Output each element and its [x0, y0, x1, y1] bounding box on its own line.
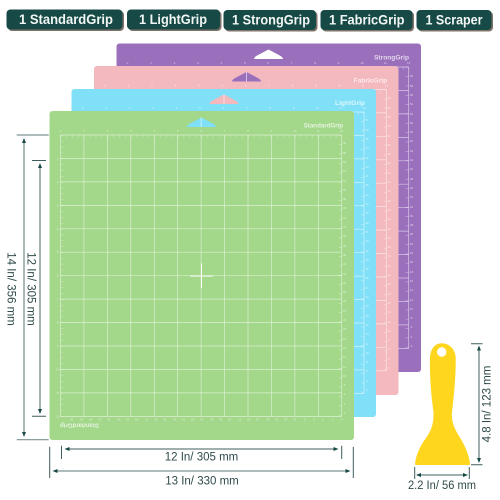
- ruler numbers: purple right: 42: [410, 158, 413, 162]
- ruler numbers: pink right: 10: [387, 329, 391, 333]
- ruler numbers: green left: 10: [56, 368, 60, 372]
- ruler numbers: green bottom: [70, 418, 343, 422]
- ruler numbers: blue right: 34: [365, 239, 369, 243]
- ruler numbers: blue right: 36: [365, 230, 369, 234]
- ruler numbers: pink right: 46: [387, 161, 391, 165]
- ruler numbers: green bottom: 10: [293, 418, 296, 422]
- ruler numbers: green right: 54: [343, 169, 346, 173]
- ruler numbers: blue right: 50: [365, 165, 369, 169]
- mat: StrongGrip purple: [116, 44, 421, 372]
- ruler numbers: pink top: 4: [198, 83, 200, 87]
- ruler numbers: green bottom: 54: [89, 418, 92, 422]
- ruler numbers: green left: 6: [57, 274, 59, 278]
- ruler numbers: pink top: 10: [338, 83, 341, 87]
- notch: white hanger: [254, 50, 283, 59]
- ruler numbers: pink top: 12: [385, 83, 388, 87]
- ruler numbers: pink right: 40: [387, 189, 391, 193]
- dimension: mat width 13 in: [50, 447, 353, 488]
- ruler numbers: purple right: 50: [410, 121, 413, 125]
- ruler numbers: green bottom: 46: [126, 418, 129, 422]
- ruler numbers: green left: [56, 156, 60, 418]
- ruler numbers: blue right: 32: [365, 249, 369, 253]
- ruler numbers: green right: 8: [344, 383, 346, 387]
- pill: 1 Scraper: [416, 10, 493, 32]
- ruler numbers: purple right: 6: [411, 325, 413, 329]
- ruler numbers: green right: 56: [343, 160, 346, 164]
- ruler numbers: blue top: 7: [246, 106, 248, 110]
- ruler numbers: green right: 40: [343, 234, 346, 238]
- ruler numbers: purple top: [127, 61, 411, 65]
- ruler numbers: pink right: 50: [387, 143, 391, 147]
- ruler numbers: green bottom: 22: [238, 418, 241, 422]
- ruler numbers: green right: 30: [343, 281, 346, 285]
- ruler numbers: pink top: 2: [151, 83, 153, 87]
- ruler numbers: purple right: 14: [410, 288, 413, 292]
- ruler numbers: pink right: 26: [387, 254, 391, 258]
- ruler numbers: purple top: 3: [197, 61, 199, 65]
- pill: 1 Scraper: 1 Scraper: [426, 12, 483, 28]
- ruler numbers: green top: 4: [153, 129, 155, 133]
- ruler numbers: green right: 48: [343, 197, 346, 201]
- ruler numbers: purple right: 54: [410, 102, 413, 106]
- ruler numbers: green right: 38: [343, 244, 346, 248]
- ruler numbers: green right: 42: [343, 225, 346, 229]
- dimension: scraper height: 4.8 In/ 123 mm: [482, 366, 494, 442]
- ruler numbers: blue top: 0: [82, 106, 84, 110]
- ruler numbers: green bottom: 2: [332, 418, 334, 422]
- ruler numbers: pink right: 48: [387, 152, 391, 156]
- notch: pink hanger: [210, 94, 238, 104]
- ruler numbers: green left: 4: [57, 227, 59, 231]
- ruler numbers: blue right: 44: [365, 193, 369, 197]
- ruler numbers: blue right: 6: [366, 369, 368, 373]
- ruler numbers: blue top: 2: [129, 106, 131, 110]
- pill: 1 LightGrip: 1 LightGrip: [139, 12, 207, 27]
- label: StandardGrip upside down: StandardGrip: [60, 422, 99, 428]
- ruler numbers: pink right: 2: [388, 366, 390, 370]
- ruler numbers: pink right: 42: [387, 180, 391, 184]
- ruler numbers: pink right: 56: [387, 115, 391, 119]
- ruler numbers: blue top: 1: [105, 106, 107, 110]
- ruler numbers: purple right: 36: [410, 186, 413, 190]
- ruler numbers: blue right: 14: [365, 332, 369, 336]
- ruler numbers: green top: 1: [83, 129, 85, 133]
- ruler numbers: green right: 28: [343, 290, 346, 294]
- ruler numbers: green bottom: 44: [135, 418, 138, 422]
- ruler numbers: pink right: 30: [387, 236, 391, 240]
- ruler numbers: purple top: 9: [338, 61, 340, 65]
- ruler numbers: purple right: 22: [410, 251, 413, 255]
- ruler numbers: pink top: 3: [175, 83, 177, 87]
- ruler numbers: purple right: 2: [411, 344, 413, 348]
- label: StandardGrip: StandardGrip: [304, 122, 343, 130]
- ruler numbers: green right: 32: [343, 272, 346, 276]
- ruler numbers: green top: 9: [271, 129, 273, 133]
- ruler numbers: purple right: 34: [410, 195, 413, 199]
- ruler numbers: green bottom: 16: [266, 418, 269, 422]
- icon: yellow scraper: [415, 343, 470, 465]
- ruler numbers: blue right: 18: [365, 314, 369, 318]
- ruler numbers: purple top: 1: [150, 61, 152, 65]
- pill: 1 FabricGrip: [320, 10, 414, 32]
- ruler numbers: green top: 5: [177, 129, 179, 133]
- dimension: scraper height: [471, 344, 494, 465]
- notch centre line: pink mat: [246, 72, 248, 82]
- dimension: grid width 12 in: 12 In/ 305 mm: [165, 452, 238, 464]
- ruler numbers: green right: 22: [343, 318, 346, 322]
- ruler numbers: blue top: 11: [339, 106, 342, 110]
- ruler numbers: green bottom: 0: [341, 418, 343, 422]
- pill: 1 StrongGrip: [224, 10, 318, 32]
- ruler numbers: purple top: 11: [384, 61, 387, 65]
- dimension: grid height 12 in: [24, 160, 46, 416]
- ruler numbers: blue top: 9: [293, 106, 295, 110]
- ruler numbers: green bottom: 38: [163, 418, 166, 422]
- ruler numbers: green right: 6: [344, 392, 346, 396]
- ruler numbers: blue top: 6: [223, 106, 225, 110]
- ruler numbers: purple top: 4: [220, 61, 222, 65]
- ruler numbers: pink right: 16: [387, 301, 391, 305]
- center cross: [190, 264, 213, 288]
- ruler numbers: blue right: 24: [365, 286, 369, 290]
- ruler numbers: pink right: 22: [387, 273, 391, 277]
- ruler numbers: blue right: 8: [366, 360, 368, 364]
- ruler numbers: pink right: 20: [387, 282, 391, 286]
- ruler numbers: green right: 20: [343, 327, 346, 331]
- ruler numbers: pink right: 38: [387, 199, 391, 203]
- ruler numbers: blue right: 58: [365, 128, 369, 132]
- dimension: scraper width: 2.2 In/ 56 mm: [408, 480, 476, 492]
- ruler numbers: pink top: 8: [292, 83, 294, 87]
- ruler numbers: purple top: 12: [407, 61, 411, 65]
- ruler numbers: purple top: 7: [291, 61, 293, 65]
- ruler numbers: blue right: 40: [365, 211, 369, 215]
- ruler numbers: purple right: [410, 74, 413, 348]
- ruler numbers: blue right: 20: [365, 304, 369, 308]
- ruler numbers: green bottom: 30: [200, 418, 203, 422]
- ruler numbers: green top: 6: [200, 129, 202, 133]
- ruler numbers: green right: 2: [344, 411, 346, 415]
- ruler numbers: blue top: [82, 106, 366, 110]
- ruler numbers: green right: 4: [344, 402, 346, 406]
- ruler numbers: green right: 52: [343, 179, 346, 183]
- ruler numbers: purple right: 24: [410, 242, 413, 246]
- ruler numbers: green right: [343, 141, 346, 415]
- ruler numbers: purple right: 8: [411, 316, 413, 320]
- ruler numbers: pink right: 24: [387, 264, 391, 268]
- ruler numbers: pink top: 11: [361, 83, 365, 87]
- ruler numbers: blue right: 16: [365, 323, 369, 327]
- ruler numbers: green left: 1: [57, 156, 59, 160]
- ruler numbers: pink top: 0: [104, 83, 106, 87]
- ruler numbers: green top: 11: [317, 129, 320, 133]
- ruler numbers: green bottom: 8: [304, 418, 306, 422]
- ruler numbers: purple right: 46: [410, 139, 413, 143]
- notch: blue hanger: [187, 118, 216, 127]
- ruler numbers: blue right: 46: [365, 183, 369, 187]
- ruler numbers: blue top: 5: [199, 106, 201, 110]
- ruler numbers: purple right: 10: [410, 307, 413, 311]
- ruler numbers: blue top: 10: [316, 106, 319, 110]
- ruler numbers: blue top: 3: [152, 106, 154, 110]
- ruler numbers: green right: 44: [343, 216, 346, 220]
- ruler numbers: purple right: 60: [410, 74, 413, 78]
- ruler numbers: green right: 58: [343, 151, 346, 155]
- pill: 1 LightGrip: [127, 10, 222, 31]
- ruler numbers: green right: 18: [343, 337, 346, 341]
- ruler numbers: green bottom: 40: [154, 418, 157, 422]
- ruler numbers: green right: 12: [343, 365, 346, 369]
- ruler numbers: purple right: 56: [410, 93, 413, 97]
- ruler numbers: blue top: 4: [176, 106, 178, 110]
- ruler numbers: green bottom: 18: [256, 418, 259, 422]
- ruler numbers: blue right: 10: [365, 351, 369, 355]
- ruler numbers: pink top: 9: [315, 83, 317, 87]
- ruler numbers: purple right: 40: [410, 167, 413, 171]
- ruler numbers: green right: 24: [343, 309, 346, 313]
- ruler numbers: pink right: 6: [388, 347, 390, 351]
- ruler numbers: blue right: 2: [366, 388, 368, 392]
- ruler numbers: green right: 60: [343, 141, 346, 145]
- ruler numbers: purple right: 32: [410, 205, 413, 209]
- ruler numbers: green top: 7: [224, 129, 226, 133]
- ruler numbers: pink right: [387, 96, 391, 370]
- ruler numbers: purple right: 28: [410, 223, 413, 227]
- label: FabricGrip: FabricGrip: [354, 78, 387, 84]
- label: StrongGrip: StrongGrip: [374, 54, 409, 62]
- ruler numbers: green top: 3: [130, 129, 132, 133]
- dimension: grid width 12 in: [62, 446, 342, 464]
- ruler numbers: green right: 26: [343, 299, 346, 303]
- ruler numbers: blue top: 12: [362, 106, 366, 110]
- ruler numbers: green top: 10: [293, 129, 297, 133]
- ruler numbers: green right: 16: [343, 346, 346, 350]
- ruler numbers: blue right: 30: [365, 258, 369, 262]
- ruler numbers: green bottom: 36: [173, 418, 176, 422]
- ruler numbers: green right: 34: [343, 262, 346, 266]
- dimension: grid height 12 in: 12 In/ 305 mm: [24, 252, 36, 326]
- ruler numbers: blue right: 4: [366, 379, 368, 383]
- ruler numbers: pink top: 5: [221, 83, 223, 87]
- ruler numbers: green bottom: 58: [70, 418, 73, 422]
- ruler numbers: blue right: 48: [365, 174, 369, 178]
- ruler numbers: green left: 2: [57, 180, 59, 184]
- dimension: mat width 13 in: 13 In/ 330 mm: [165, 476, 239, 488]
- ruler numbers: pink right: 28: [387, 245, 391, 249]
- pill: 1 StandardGrip: [6, 10, 124, 31]
- ruler numbers: purple top: 6: [267, 61, 269, 65]
- pill: 1 StandardGrip: 1 StandardGrip: [19, 12, 113, 27]
- ruler numbers: pink right: 60: [387, 96, 391, 100]
- ruler numbers: green bottom: 26: [219, 418, 222, 422]
- dimension: mat height 14 in: 14 In/ 356 mm: [4, 252, 16, 326]
- ruler numbers: green left: 9: [57, 344, 59, 348]
- ruler numbers: pink right: 18: [387, 292, 391, 296]
- ruler numbers: pink right: 4: [388, 357, 390, 361]
- ruler numbers: green right: 50: [343, 188, 346, 192]
- ruler numbers: green left: 5: [57, 250, 59, 254]
- ruler numbers: blue right: 22: [365, 295, 369, 299]
- ruler numbers: purple right: 16: [410, 279, 413, 283]
- ruler numbers: green bottom: 50: [107, 418, 110, 422]
- ruler numbers: purple right: 4: [411, 335, 413, 339]
- dimension: scraper width: [408, 467, 476, 492]
- ruler numbers: pink right: 44: [387, 171, 391, 175]
- ruler numbers: purple right: 26: [410, 232, 413, 236]
- ruler numbers: purple top: 10: [360, 61, 364, 65]
- ruler numbers: purple right: 20: [410, 260, 413, 264]
- ruler numbers: green right: 46: [343, 206, 346, 210]
- ruler numbers: green left: 3: [57, 203, 59, 207]
- ruler numbers: green bottom: 34: [182, 418, 185, 422]
- ruler numbers: pink right: 12: [387, 320, 391, 324]
- ruler numbers: green right: 36: [343, 253, 346, 257]
- ruler numbers: blue right: [365, 118, 369, 392]
- ruler numbers: pink right: 54: [387, 124, 391, 128]
- mat: StandardGrip green: [50, 111, 354, 440]
- ruler numbers: blue right: 38: [365, 221, 369, 225]
- ruler numbers: green bottom: 24: [228, 418, 231, 422]
- ruler numbers: purple top: 0: [127, 61, 129, 65]
- ruler numbers: green top: 12: [340, 129, 344, 133]
- ruler numbers: green right: 14: [343, 355, 346, 359]
- ruler numbers: green bottom: 32: [191, 418, 194, 422]
- ruler numbers: purple top: 5: [244, 61, 246, 65]
- ruler numbers: purple right: 18: [410, 270, 413, 274]
- ruler numbers: blue right: 54: [365, 146, 369, 150]
- ruler numbers: green left: 8: [57, 321, 59, 325]
- pill: 1 StrongGrip: 1 StrongGrip: [232, 12, 310, 28]
- ruler numbers: green top: 0: [60, 129, 62, 133]
- ruler numbers: blue right: 12: [365, 342, 369, 346]
- ruler numbers: blue right: 28: [365, 267, 369, 271]
- ruler numbers: green bottom: 4: [322, 418, 324, 422]
- ruler numbers: purple right: 44: [410, 149, 413, 153]
- ruler numbers: pink right: 36: [387, 208, 391, 212]
- notch: purple hanger: [232, 72, 261, 82]
- mat: FabricGrip pink: [94, 66, 398, 395]
- ruler numbers: blue right: 26: [365, 276, 369, 280]
- notch centre line: green mat: [200, 118, 202, 127]
- mat: LightGrip blue: [72, 89, 376, 417]
- ruler numbers: green left: 12: [56, 414, 60, 418]
- ruler numbers: blue right: 56: [365, 137, 369, 141]
- ruler numbers: purple top: 8: [314, 61, 316, 65]
- pill: 1 FabricGrip: 1 FabricGrip: [329, 12, 404, 28]
- ruler numbers: green bottom: 42: [145, 418, 148, 422]
- ruler numbers: blue right: 60: [365, 118, 369, 122]
- ruler numbers: pink top: 6: [245, 83, 247, 87]
- ruler numbers: green top: 8: [247, 129, 249, 133]
- ruler numbers: green top: 2: [107, 129, 109, 133]
- ruler numbers: pink right: 58: [387, 106, 391, 110]
- ruler numbers: green bottom: 28: [210, 418, 213, 422]
- ruler numbers: green bottom: 6: [313, 418, 315, 422]
- ruler numbers: pink right: 34: [387, 217, 391, 221]
- ruler numbers: green left: 11: [56, 391, 60, 395]
- ruler numbers: green bottom: 56: [80, 418, 83, 422]
- ruler numbers: blue top: 8: [269, 106, 271, 110]
- ruler numbers: pink right: 14: [387, 310, 391, 314]
- ruler numbers: purple right: 52: [410, 112, 413, 116]
- ruler numbers: green bottom: 12: [284, 418, 287, 422]
- ruler numbers: pink top: 1: [128, 83, 130, 87]
- ruler numbers: green bottom: 52: [98, 418, 101, 422]
- dimension: mat height 14 in: [4, 135, 49, 440]
- ruler numbers: green bottom: 20: [247, 418, 250, 422]
- ruler numbers: blue right: 42: [365, 202, 369, 206]
- ruler numbers: purple right: 12: [410, 298, 413, 302]
- ruler numbers: pink top: 7: [268, 83, 270, 87]
- ruler numbers: pink right: 8: [388, 338, 390, 342]
- label: LightGrip: LightGrip: [335, 100, 365, 107]
- ruler numbers: blue right: 52: [365, 156, 369, 160]
- ruler numbers: purple top: 2: [174, 61, 176, 65]
- ruler numbers: purple right: 58: [410, 84, 413, 88]
- ruler numbers: pink right: 52: [387, 134, 391, 138]
- ruler numbers: green left: 7: [57, 297, 59, 301]
- ruler numbers: pink top: [104, 83, 388, 87]
- ruler numbers: green top: [60, 129, 344, 133]
- ruler numbers: green bottom: 14: [275, 418, 278, 422]
- ruler numbers: green bottom: 48: [117, 418, 120, 422]
- ruler numbers: purple right: 30: [410, 214, 413, 218]
- ruler numbers: green right: 10: [343, 374, 346, 378]
- ruler numbers: purple right: 48: [410, 130, 413, 134]
- notch centre line: blue mat: [223, 94, 225, 104]
- ruler numbers: purple right: 38: [410, 177, 413, 181]
- ruler numbers: pink right: 32: [387, 227, 391, 231]
